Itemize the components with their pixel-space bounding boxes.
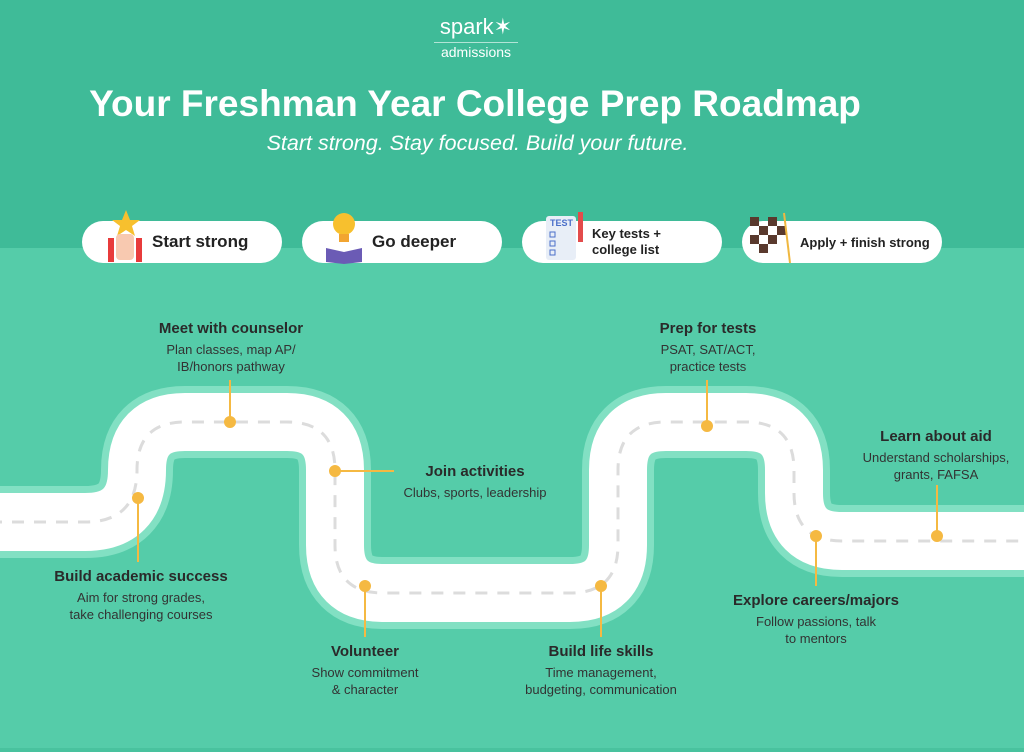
label: volunteer: & character: [332, 682, 398, 697]
label: join activities: [403, 463, 547, 500]
icon: fist with star: [108, 210, 142, 262]
pill: key tests: [522, 221, 722, 263]
icon: test sheet: [546, 212, 583, 260]
label: build academic success: Build academic success: [54, 568, 228, 585]
pill: go deeper: [302, 221, 502, 263]
label: meet with counselor: Plan classes, map AP/: [166, 342, 296, 357]
label: volunteer: [312, 643, 418, 697]
title: Your Freshman Year College Prep Roadmap: [89, 83, 861, 124]
label: explore careers: Explore careers/majors: [733, 592, 899, 609]
subtitle: Start strong. Stay focused. Build your future.: [267, 131, 688, 155]
pill: key tests: college list: [592, 242, 659, 257]
label: volunteer: Show commitment: [312, 665, 418, 680]
pill: go deeper: Go deeper: [372, 232, 456, 251]
logo: [434, 14, 518, 60]
logo: spark✶: [440, 14, 512, 39]
label: build life skills: Build life skills: [548, 643, 654, 660]
pill: start strong: [82, 221, 282, 263]
label: prep for tests: Prep for tests: [660, 320, 756, 337]
label: meet with counselor: IB/honors pathway: [177, 359, 285, 374]
logo: admissions: [441, 44, 511, 60]
label: explore careers: [733, 592, 899, 646]
label: join activities: Clubs, sports, leadership: [403, 485, 547, 500]
label: join activities: Join activities: [425, 463, 525, 480]
label: meet with counselor: Meet with counselor: [159, 320, 303, 337]
icon: lightbulb book: [326, 213, 362, 264]
label: build academic success: [54, 568, 228, 622]
label: prep for tests: [660, 320, 756, 374]
pill: key tests: Key tests +: [592, 226, 661, 241]
label: explore careers: to mentors: [785, 631, 847, 646]
label: build academic success: take challenging courses: [69, 607, 213, 622]
label: build academic success: Aim for strong grades,: [77, 590, 205, 605]
pill: apply: Apply + finish strong: [800, 234, 930, 250]
label: learn about aid: Understand scholarships,: [863, 450, 1009, 465]
label: explore careers: Follow passions, talk: [756, 614, 876, 629]
label: volunteer: Volunteer: [331, 643, 399, 660]
label: learn about aid: Learn about aid: [880, 428, 992, 445]
label: meet with counselor: [159, 320, 303, 374]
label: prep for tests: practice tests: [670, 359, 746, 374]
label: build life skills: budgeting, communication: [525, 682, 677, 697]
label: build life skills: Time management,: [545, 665, 657, 680]
pill: start strong: Start strong: [152, 232, 248, 251]
label: learn about aid: grants, FAFSA: [894, 467, 978, 482]
pill: apply: [742, 221, 942, 263]
label: build life skills: [525, 643, 677, 697]
icon: test sheet: TEST: [550, 218, 574, 228]
icon: checkered flag: [750, 212, 791, 264]
label: learn about aid: [863, 428, 1009, 482]
label: prep for tests: PSAT, SAT/ACT,: [661, 342, 755, 357]
